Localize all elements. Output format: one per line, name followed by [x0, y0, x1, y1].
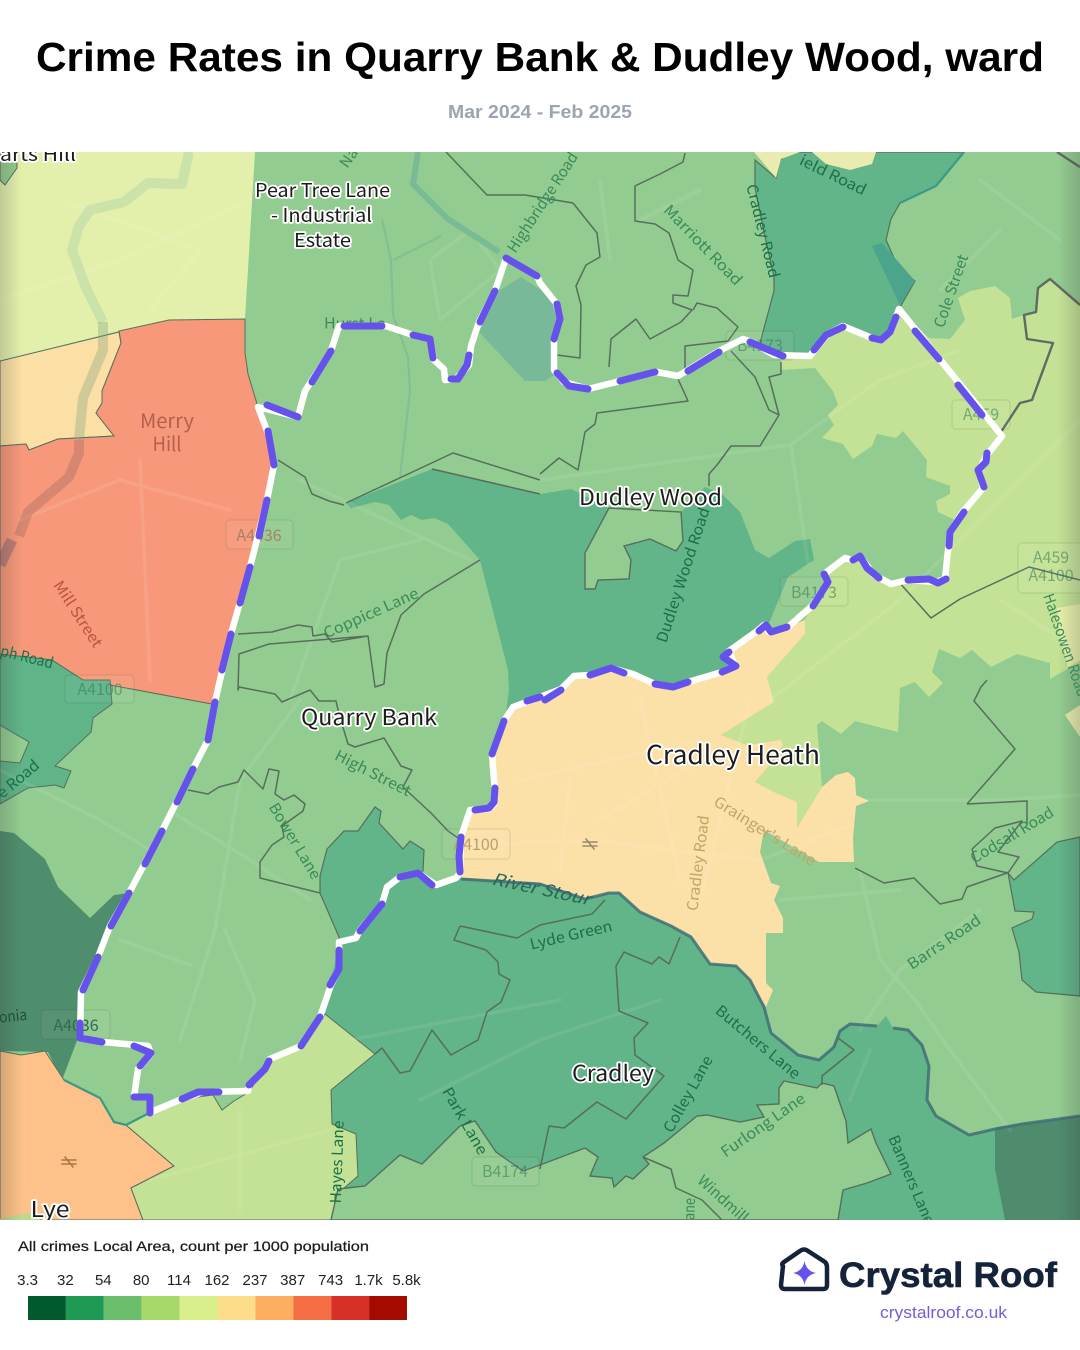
- road names: Bower Lane: [264, 799, 326, 883]
- place labels: Dudley Wood: [579, 480, 722, 512]
- road shield labels: A459: [1033, 544, 1069, 568]
- road names: Grainger's Lane: [710, 791, 820, 871]
- road names: Park Lane: [437, 1083, 493, 1159]
- legend scale values: [17, 1272, 421, 1289]
- region: mid green Furlong south: [331, 1081, 891, 1220]
- road names: Marriott Road: [659, 200, 747, 290]
- road names: Coppice Lane: [320, 582, 422, 643]
- road shield labels: A459: [963, 401, 999, 425]
- map: river edge: [461, 879, 1080, 1135]
- road names: Cole Street: [928, 251, 973, 330]
- wordmark: Crystal Roof: [839, 1256, 1057, 1295]
- road names: High Street: [331, 745, 415, 801]
- road names: Banners Lane: [884, 1132, 940, 1227]
- road shields: [41, 331, 1080, 1186]
- region: pale yellow far east: [1057, 604, 1080, 667]
- place labels: Quarry Bank: [301, 700, 437, 732]
- map: canal west: [19, 152, 189, 536]
- region: teal park: [479, 277, 556, 381]
- road names: Lyde Green: [528, 915, 614, 954]
- place labels: Cradley: [572, 1056, 655, 1088]
- road names: Codsall Road: [966, 802, 1058, 868]
- legend colour scale: [28, 1296, 407, 1320]
- map: subtle road network: [0, 180, 1080, 1210]
- logo: Crystal Roof: [781, 1250, 1057, 1322]
- place labels: Merry: [140, 405, 195, 434]
- region: salmon Merry Hill: [0, 319, 274, 704]
- road shield labels: A4100: [453, 831, 499, 855]
- road names: Dudley Wood Road: [651, 505, 715, 645]
- region: orange Lye: [0, 1051, 174, 1220]
- road names: Cradley Road: [681, 814, 714, 912]
- legend scale values: 162: [204, 1272, 230, 1289]
- map: local area boundary lines: [188, 152, 1080, 1220]
- road shield labels: B4174: [482, 1158, 528, 1182]
- region: big dark green Cradley: [325, 873, 1005, 1220]
- region: darkest green south-west: [0, 831, 129, 1080]
- place labels: - Industrial: [271, 201, 372, 228]
- ward boundary: white base line: [80, 258, 1002, 1112]
- legend scale values: 32: [57, 1272, 74, 1289]
- road names: ph Road: [0, 640, 56, 673]
- road names: Colley Lane: [658, 1052, 718, 1136]
- website url: crystalroof.co.uk: [880, 1304, 1008, 1322]
- road shield labels: B4173: [791, 579, 837, 603]
- place labels: Estate: [294, 226, 351, 253]
- legend scale values: 743: [318, 1272, 343, 1289]
- place labels: Lye: [30, 1192, 70, 1224]
- road names: Furlong Lane: [716, 1088, 809, 1162]
- legend title: All crimes Local Area, count per 1000 population: [18, 1238, 369, 1254]
- road names: Cradley Road: [741, 182, 785, 280]
- region: mid green cutout in Dudley Wood: [585, 508, 683, 589]
- icon: house with star: [781, 1250, 827, 1289]
- road shield labels: B4173: [737, 332, 783, 356]
- road names: ane: [678, 1198, 700, 1220]
- subtitle: date range: Mar 2024 - Feb 2025: [448, 102, 632, 122]
- road names: Na: [334, 143, 363, 172]
- road names: Barrs Road: [903, 909, 985, 974]
- legend scale values: 3.3: [17, 1272, 38, 1289]
- road names: ield Road: [796, 150, 870, 200]
- place labels: arts Hill: [0, 140, 76, 167]
- road shield labels: A4100: [77, 676, 123, 700]
- title: Crime Rates in Quarry Bank & Dudley Wood, ward: [36, 34, 1044, 80]
- region: cream Cradley Heath: [461, 620, 869, 1007]
- map: district boundary thick: [1001, 152, 1080, 432]
- road shield labels: [53, 332, 1074, 1182]
- region: dark green north Cradley Road: [755, 152, 964, 356]
- road shield labels: A4036: [53, 1012, 99, 1036]
- road names: River Stour: [490, 865, 596, 911]
- region: light green south: [126, 1014, 375, 1220]
- legend scale values: 1.7k: [354, 1272, 383, 1289]
- legend scale values: 387: [280, 1272, 305, 1289]
- legend scale values: 5.8k: [392, 1272, 421, 1289]
- road names: Windmill: [693, 1170, 753, 1227]
- place labels: Cradley Heath: [646, 735, 820, 772]
- legend scale values: 54: [95, 1272, 112, 1289]
- region: dark green Dudley Wood: [346, 469, 814, 721]
- road names: Highbridge Road: [502, 148, 583, 257]
- legend scale values: 237: [242, 1272, 268, 1289]
- region: dark green west: [0, 654, 112, 804]
- region: dark green patch by river: [320, 807, 424, 942]
- map: canal north: [413, 152, 499, 252]
- legend scale values: 80: [133, 1272, 150, 1289]
- region: pale patches north edge: [754, 152, 800, 178]
- map: edge shading: [0, 152, 1080, 1220]
- region: light green east: [721, 279, 1080, 828]
- place labels: Pear Tree Lane: [255, 176, 390, 203]
- road shield labels: A4036: [236, 522, 282, 546]
- region: dark green east: [1008, 837, 1080, 996]
- legend: [17, 1238, 421, 1320]
- region: cream west: [0, 332, 121, 450]
- road shield labels: A4100: [1028, 562, 1074, 586]
- road names: Hurst La: [324, 312, 386, 333]
- road names: Hayes Lane: [325, 1120, 349, 1204]
- road names: Butchers Lane: [711, 1000, 805, 1084]
- place labels: [0, 140, 820, 1224]
- road names: Mill Street: [49, 576, 108, 652]
- legend scale values: 114: [167, 1272, 191, 1289]
- region: pale yellow north-west: [0, 152, 255, 361]
- place labels: Hill: [152, 428, 182, 457]
- icons: rail stations: [62, 839, 597, 1167]
- region: darkest green south-east: [995, 1116, 1080, 1220]
- ward boundary: purple dashes: [80, 258, 987, 1113]
